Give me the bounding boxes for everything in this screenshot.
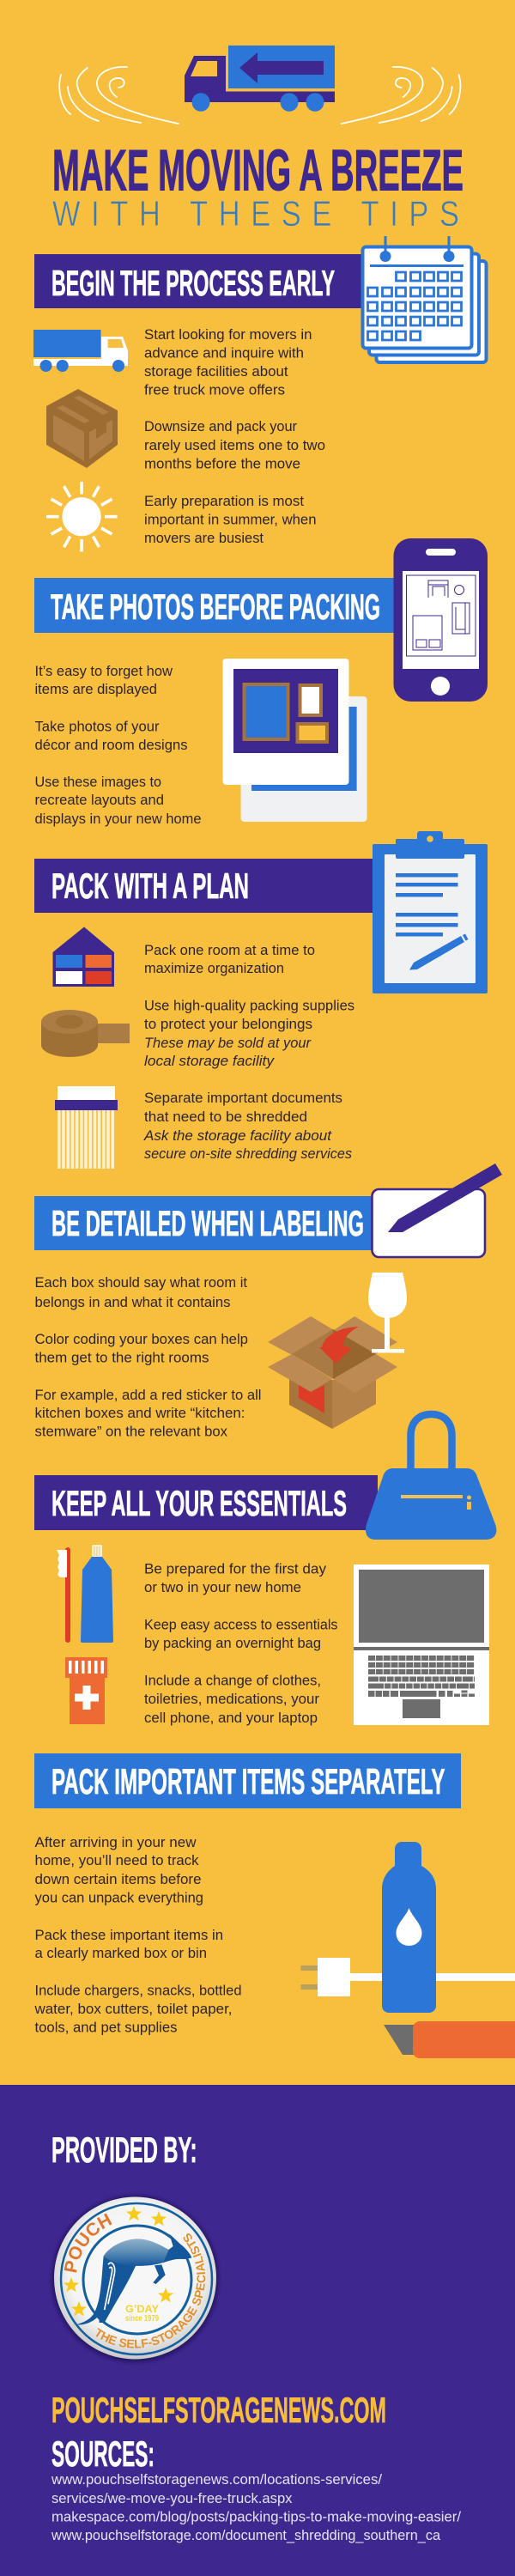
heading: sources: SOURCES: — [52, 2433, 154, 2474]
text: packing supplies: to protect your belongings — [144, 1016, 312, 1032]
text: important items: Pack these important items in — [34, 1927, 223, 1943]
text: photo tips: Use these images to — [34, 774, 161, 790]
heading bar — [34, 254, 365, 308]
text: photo tips: items are displayed — [34, 681, 157, 697]
heading bar — [34, 859, 374, 913]
text: look for movers: Start looking for movers in — [144, 326, 312, 343]
text: essentials: Keep easy access to essentials — [144, 1616, 338, 1633]
icon: white truck — [33, 330, 128, 372]
panel: pack with a plan — [34, 831, 488, 1162]
text: labeling tips: Color coding your boxes can help — [34, 1331, 248, 1347]
icon: packing tape — [41, 1010, 130, 1057]
text: photo tips: recreate layouts and — [34, 792, 164, 808]
panel: take photos before packing — [34, 538, 488, 827]
logo: Pouch self-storage badge: since 1979 — [125, 2314, 159, 2324]
icon: sun — [46, 482, 117, 551]
icon: wind swirls left — [59, 67, 179, 124]
icon: box cutter — [384, 2021, 515, 2058]
text: packing supplies — [144, 998, 354, 1069]
heading bar — [34, 1475, 378, 1530]
text: photo tips: displays in your new home — [34, 811, 201, 827]
text: important items: home, you’ll need to track — [34, 1852, 199, 1868]
text: photo tips — [34, 663, 201, 827]
logo: Pouch self-storage badge: POUCH — [64, 2214, 112, 2273]
text: essentials: Include a change of clothes, — [144, 1673, 321, 1688]
icon: open box with red arrow and wine glass — [268, 1273, 407, 1429]
text: shredding — [143, 1090, 352, 1162]
text: source links: www.pouchselfstoragenews.com/locations-services/ — [51, 2471, 382, 2488]
text: important items: you can unpack everything — [34, 1889, 203, 1906]
text: summer — [144, 493, 316, 546]
icon: truck — [185, 46, 335, 112]
text: labeling tips: belongs in and what it contains — [34, 1294, 230, 1310]
panel: begin the process early — [33, 236, 486, 551]
text: summer: Early preparation is most — [144, 493, 304, 509]
text: important items: water, box cutters, toilet paper, — [34, 2001, 233, 2017]
text: downsize — [144, 418, 325, 472]
logo: Pouch self-storage badge: G’DAY — [125, 2303, 159, 2315]
text: labeling tips: For example, add a red sticker to all — [34, 1387, 261, 1403]
logo: Pouch self-storage badge — [50, 2193, 221, 2365]
text: labeling tips: Each box should say what room it — [34, 1274, 247, 1291]
text: one room at a time: Pack one room at a time to — [144, 942, 315, 958]
text: look for movers — [144, 326, 312, 398]
icon: label and marker — [373, 1163, 502, 1257]
text: important items: After arriving in your new — [34, 1834, 197, 1850]
text: source links: makespace.com/blog/posts/packing-tips-to-make-moving-easier/ — [52, 2509, 461, 2524]
icon: toothbrush and toothpaste — [57, 1545, 113, 1643]
heading bar — [34, 1753, 461, 1808]
text: important items: down certain items before — [34, 1871, 201, 1887]
icon: paper shredder — [55, 1086, 118, 1139]
header illustration: moving truck with wind swirls — [59, 46, 460, 124]
text: labeling tips: stemware” on the relevant box — [34, 1424, 227, 1439]
heading bar: PACK WITH A PLAN — [52, 866, 249, 906]
text: essentials: toiletries, medications, your — [144, 1691, 319, 1707]
text: essentials: Be prepared for the first day — [144, 1561, 326, 1577]
text: shredding: Ask the storage facility about — [143, 1127, 332, 1144]
icon: cardboard box — [46, 389, 118, 468]
text: downsize: Downsize and pack your — [144, 418, 297, 434]
text: downsize: rarely used items one to two — [144, 437, 325, 453]
heading bar — [34, 578, 397, 633]
text: source links: services/we-move-you-free-truck.aspx — [52, 2490, 293, 2506]
title: WITH THESE TIPS — [52, 194, 459, 234]
text: look for movers: storage facilities about — [144, 363, 288, 380]
text: photo tips: décor and room designs — [34, 737, 187, 753]
text: photo tips: It’s easy to forget how — [34, 663, 173, 679]
text: summer: important in summer, when — [144, 512, 316, 527]
text: source links: www.pouchselfstorage.com/document_shredding_southern_ca — [51, 2527, 441, 2543]
text: one room at a time: maximize organization — [144, 960, 284, 976]
text: important items: tools, and pet supplies — [34, 2020, 177, 2035]
icon: laptop — [354, 1564, 489, 1725]
panel: be detailed when labeling — [34, 1163, 502, 1439]
text: photo tips: Take photos of your — [34, 718, 160, 735]
panel: footer — [0, 2085, 515, 2576]
text: shredding: that need to be shredded — [144, 1109, 307, 1125]
text: one room at a time — [144, 942, 315, 976]
text: important items: a clearly marked box or bin — [34, 1945, 207, 1961]
text: labeling tips — [34, 1274, 261, 1439]
text: essentials: cell phone, and your laptop — [144, 1710, 318, 1726]
text: look for movers: advance and inquire with — [144, 345, 304, 361]
text: downsize: months before the move — [144, 455, 300, 472]
heading bar — [34, 1196, 373, 1250]
text: look for movers: free truck move offers — [144, 381, 285, 398]
panel: keep all your essentials — [34, 1414, 496, 1726]
icon: blue bag — [366, 1414, 496, 1540]
title — [52, 137, 464, 234]
icon: power plug and cord — [300, 1958, 515, 1996]
text: packing supplies: These may be sold at your — [144, 1035, 312, 1051]
text: packing supplies: Use high-quality packing supplies — [144, 998, 354, 1013]
text: source links — [51, 2471, 461, 2543]
icon: medicine bottle — [65, 1657, 107, 1724]
text: important items — [34, 1834, 242, 2035]
text: labeling tips: kitchen boxes and write “kitchen: — [34, 1405, 245, 1421]
text: packing supplies: local storage facility — [144, 1053, 276, 1069]
icon: calendar — [362, 236, 486, 362]
text: essentials — [144, 1561, 338, 1726]
icon: house with coloured rooms — [53, 927, 114, 987]
logo: Pouch self-storage badge: THE SELF-STORAGE SPECIALISTS — [96, 2233, 206, 2348]
text: summer: movers are busiest — [144, 530, 264, 546]
text: shredding: secure on-site shredding services — [144, 1145, 352, 1162]
text: shredding: Separate important documents — [144, 1090, 342, 1106]
text: essentials: or two in your new home — [144, 1579, 301, 1595]
icon: phone with floor plan — [393, 538, 488, 702]
icon: clipboard — [373, 831, 488, 993]
text: labeling tips: them get to the right rooms — [34, 1350, 209, 1365]
icon: water bottle — [382, 1842, 436, 2013]
text: important items: Include chargers, snacks, bottled — [34, 1982, 242, 1999]
text: essentials: by packing an overnight bag — [144, 1635, 321, 1651]
heading: provided by: PROVIDED BY: — [52, 2129, 197, 2170]
icon: wind swirls right — [342, 67, 460, 124]
panel: pack important items separately — [34, 1753, 515, 2058]
icon: photo prints — [223, 659, 367, 822]
